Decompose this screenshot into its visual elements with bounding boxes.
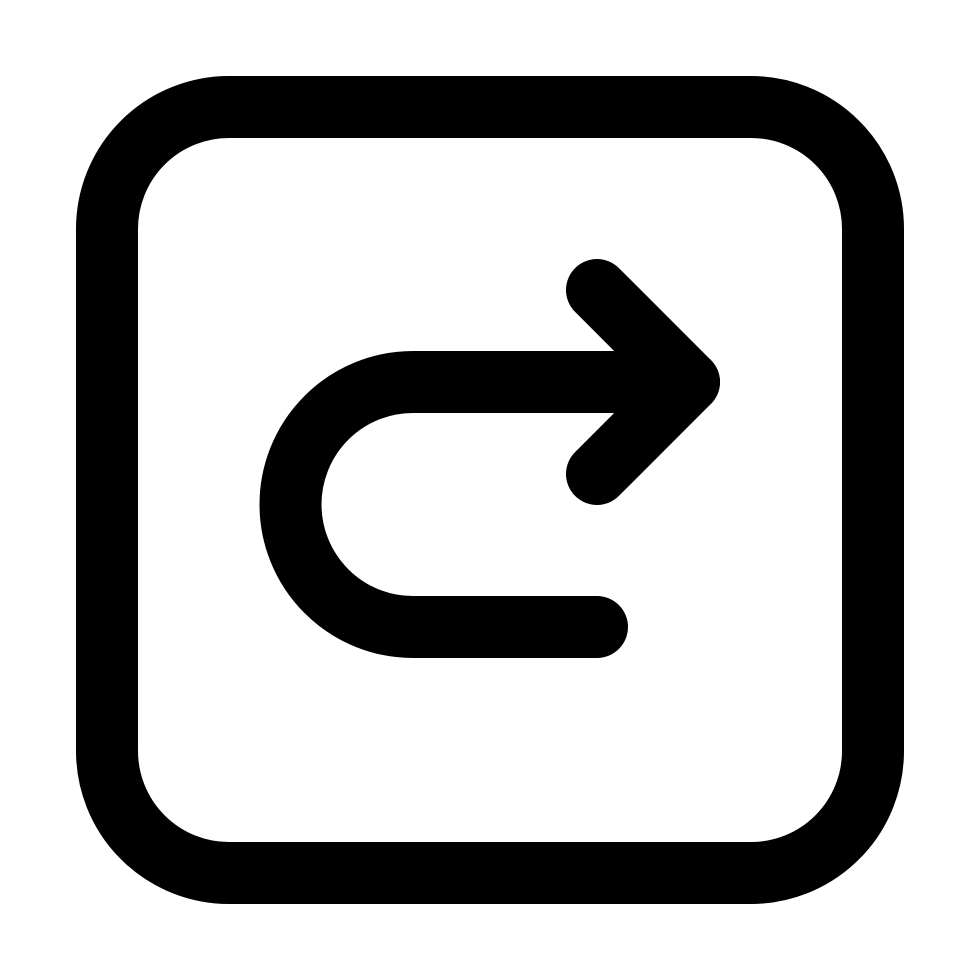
U-turn arrow [290,290,689,627]
arrow head [597,290,689,474]
rounded square frame [107,107,873,873]
arrow shaft [290,382,689,627]
